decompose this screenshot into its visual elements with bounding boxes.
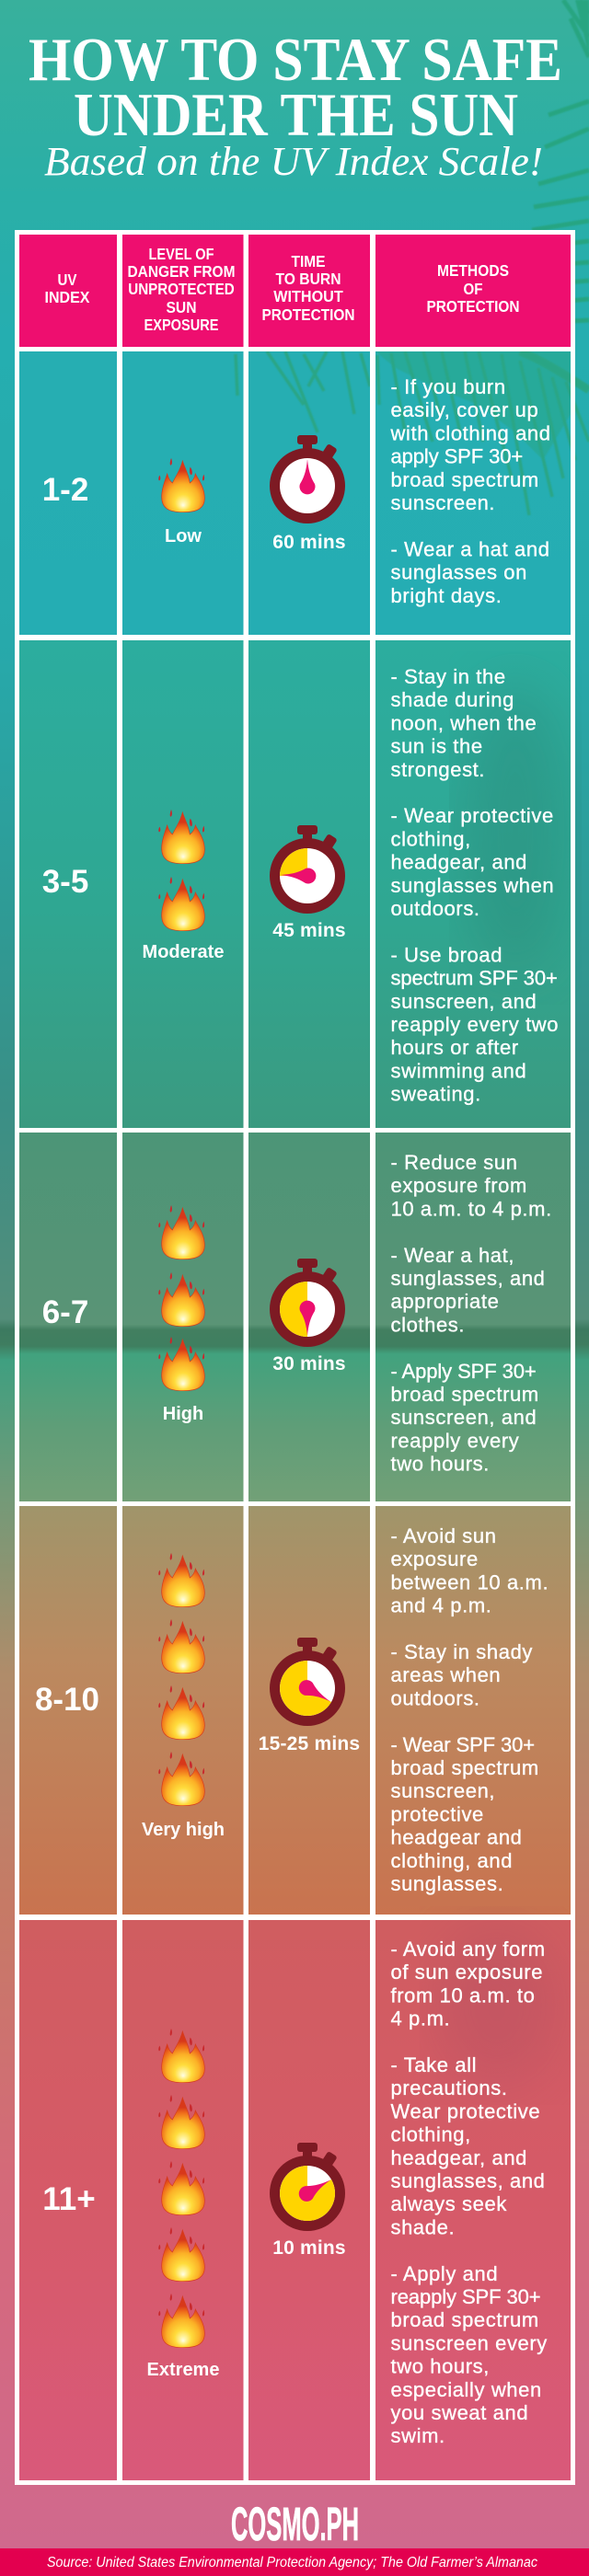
methods of protection: - Use broad [390, 943, 502, 966]
time label: 10 mins [272, 2237, 346, 2259]
title [29, 26, 562, 149]
danger level label: Low [165, 526, 202, 546]
header: methods of protection: PROTECTION [427, 297, 519, 316]
time label: 60 mins [272, 532, 346, 553]
methods of protection: bright days. [390, 584, 502, 607]
danger level label: Moderate [143, 942, 224, 962]
icon: one flame [158, 458, 204, 512]
header row [19, 235, 571, 347]
methods of protection: - Stay in the [390, 665, 506, 688]
methods of protection: broad spectrum [390, 2308, 539, 2331]
methods of protection: hours or after [390, 1036, 519, 1059]
title: UNDER THE SUN [74, 81, 518, 149]
methods of protection: between 10 a.m. [390, 1570, 549, 1593]
header: level of danger: DANGER FROM [127, 262, 236, 281]
methods of protection: - Take all [390, 2053, 477, 2076]
logo: COSMO.PH: COSMO.PH [231, 2498, 359, 2550]
header: level of danger: EXPOSURE [144, 316, 219, 334]
methods of protection: noon, when the [390, 711, 537, 734]
methods of protection: - Wear a hat, [390, 1244, 514, 1267]
methods of protection: easily, cover up [390, 398, 538, 421]
header: time to burn: TO BURN [276, 270, 341, 288]
methods of protection: clothing, and [390, 1849, 513, 1872]
methods of protection: 10 a.m. to 4 p.m. [390, 1197, 552, 1220]
icon: stopwatch 10 mins [270, 2143, 345, 2231]
palm leaves [236, 0, 589, 515]
methods of protection: reapply every two [390, 1013, 559, 1036]
UV index value: 8-10 [35, 1682, 99, 1718]
header: level of danger: UNPROTECTED [128, 280, 235, 298]
methods of protection: areas when [390, 1663, 501, 1686]
methods of protection: strongest. [390, 758, 485, 781]
icon: four flames [158, 1553, 204, 1806]
header: UV index: INDEX [44, 288, 90, 306]
methods of protection: broad spectrum [390, 1756, 539, 1779]
methods of protection: outdoors. [390, 1686, 480, 1709]
methods of protection: sunscreen, [390, 1779, 495, 1802]
methods of protection: clothing, [390, 827, 471, 850]
icon: three flames [158, 1205, 204, 1391]
time label: 15-25 mins [259, 1733, 360, 1754]
methods of protection: sunscreen. [390, 491, 495, 514]
header: methods of protection: METHODS [437, 261, 509, 280]
methods of protection: you sweat and [390, 2401, 528, 2424]
header: time to burn: TIME [291, 252, 326, 270]
methods of protection: Wear protective [390, 2099, 540, 2122]
methods of protection: sunglasses, and [390, 2169, 545, 2192]
methods of protection: shade. [390, 2215, 455, 2238]
methods of protection: two hours. [390, 1453, 490, 1476]
methods of protection: sunglasses, and [390, 1267, 545, 1290]
methods of protection: from 10 a.m. to [390, 1984, 535, 2007]
methods of protection: shade during [390, 688, 514, 711]
methods of protection: with clothing and [390, 421, 551, 444]
methods of protection: exposure from [390, 1174, 527, 1197]
methods of protection: clothing, [390, 2123, 471, 2146]
icon: two flames [158, 810, 204, 931]
methods of protection: sunscreen every [390, 2331, 548, 2354]
methods of protection: sun is the [390, 735, 483, 758]
icon: stopwatch 45 mins [270, 825, 345, 914]
methods of protection: swim. [390, 2424, 445, 2447]
methods of protection: protective [390, 1802, 484, 1825]
panel: UV 3-5 [42, 665, 559, 1106]
methods of protection: of sun exposure [390, 1961, 543, 1984]
source bar [0, 2548, 589, 2576]
methods of protection: headgear, and [390, 2146, 527, 2169]
header: methods of protection [375, 235, 571, 347]
methods of protection: apply SPF 30+ [390, 445, 523, 468]
methods of protection: sunglasses when [390, 874, 554, 897]
methods of protection: 4 p.m. [390, 2007, 450, 2030]
methods of protection: reapply every [390, 1429, 519, 1452]
methods of protection: - Avoid any form [390, 1938, 546, 1961]
header: UV index [19, 235, 117, 347]
header: UV index: UV [57, 270, 77, 289]
methods of protection: broad spectrum [390, 468, 539, 491]
methods of protection: reapply SPF 30+ [390, 2285, 541, 2308]
methods of protection: - Wear protective [390, 804, 554, 827]
methods of protection: exposure [390, 1547, 479, 1570]
header: level of danger: LEVEL OF [149, 245, 214, 263]
methods of protection: - Apply and [390, 2262, 498, 2285]
methods of protection: always seek [390, 2192, 507, 2215]
danger level label: Very high [142, 1820, 225, 1840]
icon: stopwatch 30 mins [270, 1259, 345, 1347]
danger level label: Extreme [147, 2360, 219, 2380]
methods of protection: swimming and [390, 1059, 526, 1082]
methods of protection: - Reduce sun [390, 1151, 518, 1174]
methods of protection: sunglasses. [390, 1872, 503, 1895]
panel: UV 11+ [42, 1938, 548, 2447]
icon: stopwatch 15-25 mins [270, 1638, 345, 1726]
icon: stopwatch 60 mins [270, 435, 345, 523]
row tint panels [19, 351, 571, 2480]
panel: UV 6-7 [42, 1151, 552, 1476]
methods of protection: headgear, and [390, 851, 527, 874]
panel: UV 1-2 [42, 375, 551, 607]
header: level of danger [122, 235, 243, 347]
UV index value: 3-5 [42, 864, 88, 900]
header: time to burn [248, 235, 370, 347]
methods of protection: spectrum SPF 30+ [390, 967, 558, 990]
methods of protection: - Wear a hat and [390, 537, 550, 560]
header: level of danger: SUN [166, 298, 197, 316]
time label: 45 mins [272, 920, 346, 941]
methods of protection: broad spectrum [390, 1383, 539, 1406]
methods of protection: especially when [390, 2378, 542, 2401]
UV index value: 11+ [42, 2181, 96, 2217]
methods of protection: - Avoid sun [390, 1524, 497, 1547]
methods of protection: sweating. [390, 1083, 481, 1106]
header: time to burn: PROTECTION [261, 305, 355, 324]
methods of protection: - Wear SPF 30+ [390, 1733, 535, 1756]
methods of protection: sunscreen, and [390, 990, 537, 1013]
UV index value: 6-7 [42, 1294, 88, 1330]
subtitle: Based on the UV Index Scale! [44, 139, 543, 184]
methods of protection: outdoors. [390, 897, 480, 920]
methods of protection: sunscreen, and [390, 1406, 537, 1429]
methods of protection: - Apply SPF 30+ [390, 1360, 537, 1383]
methods of protection: - Stay in shady [390, 1640, 533, 1663]
methods of protection: precautions. [390, 2076, 508, 2099]
methods of protection: clothes. [390, 1313, 465, 1336]
panel: UV 8-10 [35, 1524, 549, 1895]
methods of protection: headgear and [390, 1826, 523, 1849]
header: methods of protection: OF [464, 280, 483, 298]
icon: five flames [158, 2029, 204, 2348]
header: time to burn: WITHOUT [273, 287, 343, 305]
methods of protection: and 4 p.m. [390, 1594, 491, 1617]
methods of protection: appropriate [390, 1290, 499, 1313]
methods of protection: two hours, [390, 2355, 490, 2378]
methods of protection: sunglasses on [390, 561, 527, 584]
source bar: Source: United States Environmental Protection Agency; The Old Farmer’s Almanac [47, 2555, 537, 2570]
methods of protection: - If you burn [390, 375, 506, 398]
UV index value: 1-2 [42, 472, 88, 508]
time label: 30 mins [272, 1353, 346, 1374]
danger level label: High [163, 1404, 203, 1424]
